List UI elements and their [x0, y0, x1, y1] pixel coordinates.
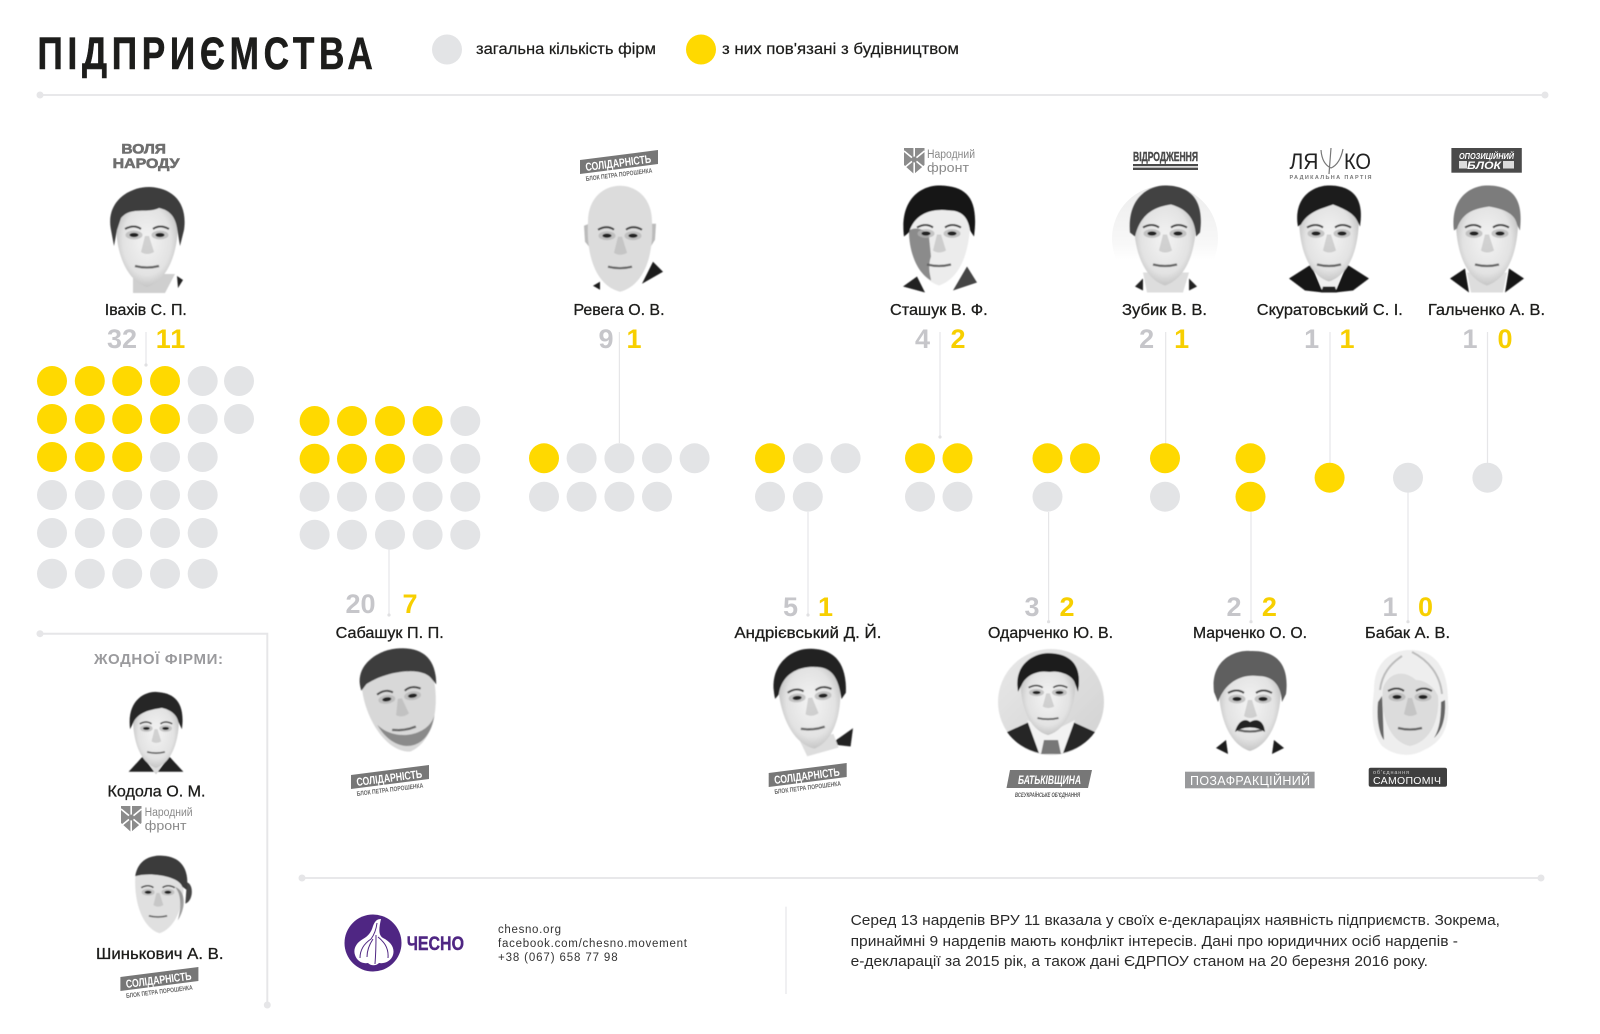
connector [618, 332, 620, 443]
logo: Відродження: ВІДРОДЖЕННЯ [1133, 150, 1198, 164]
person: Сабашук [336, 549, 446, 798]
person: Марченко [1185, 512, 1315, 788]
connector [1406, 492, 1410, 623]
counts [1382, 592, 1433, 622]
counts: 0 [1497, 324, 1513, 354]
dot [1315, 463, 1345, 493]
contacts: chesno.org [498, 924, 561, 936]
photo: Скуратовський [1289, 186, 1369, 292]
counts [1304, 324, 1355, 354]
legend item: construction firms: з них пов'язані з будівництвом [722, 41, 959, 58]
dots: Сташук 4 / 2 [905, 443, 972, 512]
person: Сташук [890, 148, 988, 439]
logo: Воля народу [113, 140, 180, 171]
footer text: принаймні 9 нардепів мають конфлікт інтересів. Дані про юридичних осіб нардепів - [851, 934, 1458, 950]
logo: Ляшко [1290, 148, 1372, 181]
title: ПІДПРИЄМСТВА [38, 28, 378, 79]
counts [1139, 324, 1189, 354]
legend item: total firms [432, 34, 656, 64]
logo: Солідарність: СОЛІДАРНІСТЬ [356, 769, 423, 789]
name: Сташук В. Ф. [890, 302, 988, 319]
name: Андрієвський Д. Й. [734, 623, 881, 642]
person: Гальченко [1428, 148, 1545, 493]
person: Ревега [574, 150, 664, 443]
logo: Відродження [1133, 150, 1198, 170]
logo: Солідарність [351, 765, 429, 798]
logo: Народний фронт [121, 806, 193, 833]
counts: 1 [626, 324, 642, 354]
logo: Солідарність: СОЛІДАРНІСТЬ [125, 971, 192, 991]
dots: Зубик 2 / 1 [1150, 443, 1180, 512]
dots: Андрієвський 5 / 1 [755, 443, 861, 512]
footer text [851, 913, 1500, 970]
contacts [498, 924, 688, 964]
heading: no firms: ЖОДНОЇ ФІРМИ: [93, 651, 223, 668]
icon: garlic [344, 914, 402, 972]
counts: 0 [1418, 592, 1433, 622]
logo: Опозиційний блок [1451, 148, 1522, 173]
counts: 1 [1339, 324, 1355, 354]
logo: Народний фронт: фронт [145, 818, 187, 833]
dot [1472, 463, 1502, 493]
logo: Ляшко: ЛЯ [1290, 149, 1318, 174]
logo: Солідарність [120, 967, 198, 1000]
counts [1226, 592, 1277, 622]
logo: Самопоміч [1369, 768, 1447, 787]
name: Ревега О. В. [574, 302, 664, 319]
photo: Ревега [584, 186, 663, 292]
footer text: Серед 13 нардепів ВРУ 11 вказала у своїх е-деклараціях наявність підприємств. Зокрема, [851, 913, 1500, 929]
name: Івахів С. П. [105, 302, 187, 319]
photo: Сташук [903, 185, 977, 292]
logo: Солідарність: БЛОК ПЕТРА ПОРОШЕНКА [356, 782, 424, 798]
photo: Кодола [129, 692, 183, 774]
counts [107, 324, 186, 354]
counts: 9 [598, 324, 614, 354]
logo: Солідарність [580, 150, 658, 183]
dots: Сабашук 20 / 7 [300, 406, 480, 550]
photo: Зубик [1112, 186, 1218, 292]
name: Кодола О. М. [108, 784, 206, 801]
counts: 4 [915, 324, 930, 354]
connector [1486, 332, 1488, 463]
logo: Солідарність: СОЛІДАРНІСТЬ [585, 154, 652, 174]
counts [783, 592, 833, 622]
counts: 1 [818, 592, 833, 622]
logo: Самопоміч: САМОПОМІЧ [1373, 775, 1441, 787]
connector [806, 512, 810, 617]
logo: Ляшко: КО [1344, 149, 1371, 174]
footer text: е-декларації за 2015 рік, а також дані ЄДРПОУ станом на 20 березня 2016 року. [851, 954, 1428, 970]
photo: Іваxів [110, 187, 185, 293]
name: Марченко О. О. [1193, 625, 1307, 642]
photo: Марченко [1214, 651, 1287, 754]
counts: 11 [156, 324, 186, 354]
logo: Опозиційний блок: БЛОК [1467, 160, 1502, 172]
name: Скуратовський С. І. [1257, 302, 1403, 319]
person: Зубик [1112, 150, 1218, 444]
connector [387, 549, 391, 617]
person: Одарченко [988, 512, 1113, 799]
counts: 3 [1024, 592, 1040, 622]
counts: 2 [1262, 592, 1277, 622]
logo: Солідарність: БЛОК ПЕТРА ПОРОШЕНКА [126, 984, 193, 1000]
counts: 1 [1462, 324, 1478, 354]
counts: 2 [1226, 592, 1242, 622]
contacts: +38 (067) 658 77 98 [498, 952, 618, 964]
logo: Солідарність: СОЛІДАРНІСТЬ [774, 767, 841, 787]
counts [1024, 592, 1075, 622]
legend item: construction firms [686, 34, 959, 64]
logo: Солідарність: БЛОК ПЕТРА ПОРОШЕНКА [585, 167, 653, 183]
photo: Одарченко [998, 649, 1104, 755]
name: Зубик В. В. [1122, 302, 1207, 319]
logo: Батьківщина [1006, 770, 1092, 799]
counts: 5 [783, 592, 798, 622]
counts [598, 324, 642, 354]
logo: Воля народу: ВОЛЯ [121, 140, 166, 156]
dots: Марченко 2 / 2 [1236, 443, 1266, 512]
counts: 1 [1174, 324, 1189, 354]
logo: Ляшко: РАДИКАЛЬНА ПАРТІЯ [1290, 175, 1372, 181]
counts: 2 [1059, 592, 1075, 622]
counts: 20 [345, 589, 376, 619]
logo: Солідарність: БЛОК ПЕТРА ПОРОШЕНКА [774, 780, 842, 796]
dots: Одарченко 3 / 2 [1032, 443, 1100, 512]
legend [432, 34, 959, 64]
counts: 1 [1304, 324, 1319, 354]
person: Андрієвський [734, 512, 881, 796]
dots: Ревега 9 / 1 [529, 443, 710, 512]
photo: Сабашук [356, 644, 446, 757]
name: Бабак А. В. [1365, 625, 1450, 642]
contacts: facebook.com/chesno.movement [498, 938, 688, 950]
name: Гальченко А. В. [1428, 302, 1545, 319]
photo: Бабак [1372, 650, 1448, 755]
dot [1393, 463, 1423, 493]
counts: 2 [1139, 324, 1154, 354]
logo: Народний фронт: фронт [927, 160, 969, 175]
connector [144, 332, 148, 367]
logo: Народний фронт: Народний [145, 807, 193, 819]
counts: 32 [107, 324, 137, 354]
connector [1047, 512, 1050, 623]
counts: 7 [402, 589, 418, 619]
logo: Народний фронт [904, 148, 975, 175]
logo: Чесно [344, 914, 464, 972]
logo: Солідарність [769, 763, 847, 796]
counts [1462, 324, 1513, 354]
logo: Опозиційний блок: ОПОЗИЦІЙНИЙ [1459, 150, 1515, 161]
name: Шинькович А. В. [96, 946, 224, 963]
counts: 1 [1382, 592, 1398, 622]
name: Сабашук П. П. [336, 625, 444, 642]
legend item: total firms: загальна кількість фірм [476, 41, 656, 58]
photo: Шинькович [135, 856, 192, 933]
photo: Гальченко [1450, 186, 1524, 292]
connector [1249, 512, 1253, 623]
person: Іваxів [105, 140, 187, 367]
name: Одарченко Ю. В. [988, 625, 1113, 642]
counts [345, 589, 418, 619]
connector [938, 332, 942, 439]
connector [1329, 332, 1331, 463]
logo: Народний фронт: Народний [927, 149, 975, 161]
connector [1165, 332, 1167, 444]
logo: Батьківщина: ВСЕУКРАЇНСЬКЕ ОБ'ЄДНАННЯ [1015, 792, 1080, 799]
dots: Івахів 32 / 11 [37, 366, 254, 589]
person: Бабак [1365, 463, 1450, 787]
counts [915, 324, 966, 354]
logo: Позафракційний: ПОЗАФРАКЦІЙНИЙ [1190, 773, 1310, 788]
logo: Батьківщина: БАТЬКІВЩИНА [1018, 773, 1081, 787]
logo: Воля народу: НАРОДУ [113, 155, 180, 171]
panel: no firms [36, 630, 271, 1008]
person: Скуратовський [1257, 148, 1403, 493]
logo: Самопоміч: об'єднання [1373, 770, 1409, 776]
photo: Андрієвський [770, 645, 855, 759]
wordmark: ЧЕСНО [407, 934, 464, 955]
counts: 2 [950, 324, 966, 354]
